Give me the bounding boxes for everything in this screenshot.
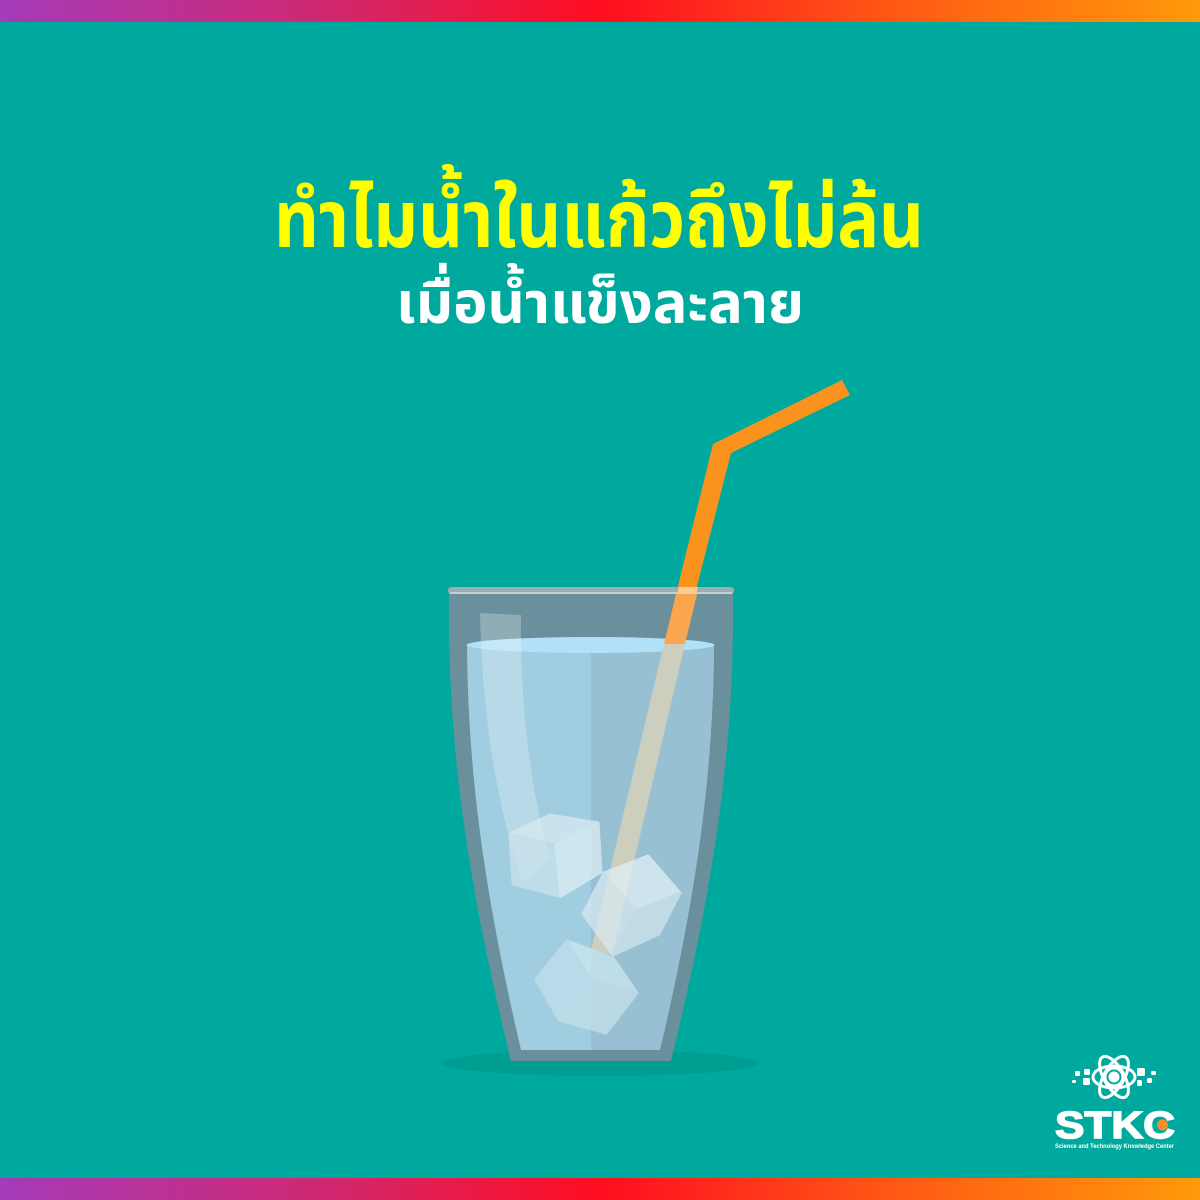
logo tagline: Science and Technology Knowledge Center [1055,1144,1175,1150]
ice cube top [510,815,601,896]
water [467,645,714,1050]
logo atom icon [1093,1052,1135,1102]
ice cube middle [583,856,680,955]
logo wordmark: STKC [1055,1105,1175,1147]
glass body [449,592,733,1061]
straw above glass [677,380,850,590]
glass rim [448,587,734,594]
logo orange dot [1157,1120,1168,1130]
top gradient bar [0,0,1200,22]
straw in water [591,644,685,955]
ice cube bottom [536,941,637,1033]
water surface [466,637,714,653]
bottom gradient bar [0,1178,1200,1200]
rim highlight line [450,592,732,594]
title: ทำไมน้ำในแก้วถึงไม่ล้น [274,164,924,264]
glass highlight [480,613,550,883]
logo: STKC [1055,1052,1175,1150]
glass shadow [441,1050,759,1076]
water right shade [591,645,714,1050]
logo dots [1072,1068,1156,1086]
subtitle: เมื่อน้ำแข็งละลาย [396,262,804,336]
rim over straw [677,587,698,594]
glass [448,587,734,1061]
straw seen through air in glass [664,590,698,644]
